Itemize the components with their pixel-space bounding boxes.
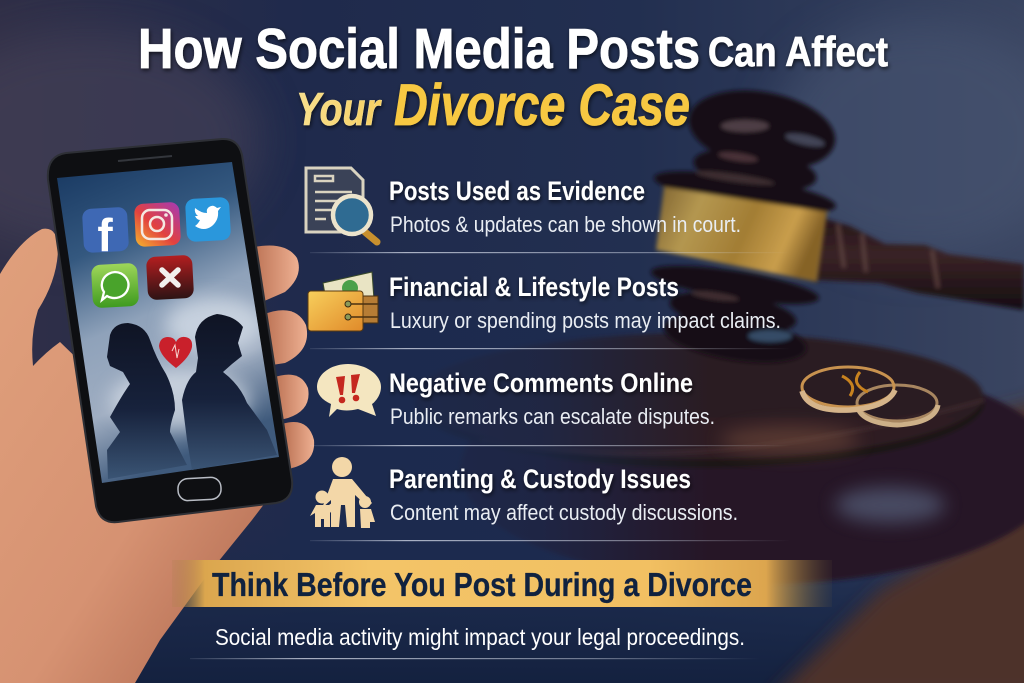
title line 1: How Social Media Posts — [138, 17, 700, 81]
fingers — [250, 246, 314, 472]
item: parenting and custody issues — [310, 457, 738, 528]
description: Public remarks can escalate disputes. — [390, 404, 715, 429]
icon: facebook — [82, 207, 129, 261]
icon: instagram — [134, 202, 181, 247]
description: Luxury or spending posts may impact claims. — [390, 308, 781, 333]
broken heart — [159, 337, 192, 368]
gold band — [656, 187, 827, 282]
banner heading: Think Before You Post During a Divorce — [212, 566, 752, 603]
home button — [177, 477, 222, 501]
block highlights — [720, 426, 945, 523]
hand — [0, 229, 314, 683]
item: financial and lifestyle posts — [308, 272, 781, 333]
description: Content may affect custody discussions. — [390, 500, 738, 525]
icon: speech bubble with exclamation marks — [317, 364, 381, 417]
silhouette: man — [182, 314, 277, 470]
gavel head — [649, 80, 841, 371]
title line 2: Your — [296, 83, 382, 135]
heading: Negative Comments Online — [389, 368, 693, 398]
closing note: Social media activity might impact your legal proceedings. — [215, 624, 745, 650]
icon: blocked app — [146, 255, 194, 300]
title line 2 — [296, 73, 690, 138]
description: Photos & updates can be shown in court. — [390, 212, 741, 237]
sound block — [415, 333, 1024, 584]
icon: wallet with cash — [308, 272, 378, 331]
palm and thumb — [0, 229, 290, 683]
icon: family — [310, 457, 375, 528]
heading: Parenting & Custody Issues — [389, 464, 691, 494]
wedding rings — [802, 367, 938, 425]
smartphone — [48, 139, 292, 522]
clouds — [110, 297, 265, 430]
navy fade over left of block — [290, 320, 710, 590]
icon: whatsapp — [91, 263, 139, 308]
banner ribbon — [172, 560, 832, 607]
phone body — [48, 139, 292, 522]
icon: twitter — [185, 197, 231, 242]
call-to-action banner — [172, 560, 832, 607]
phone speaker — [118, 156, 172, 161]
title — [138, 17, 888, 138]
phone screen — [57, 162, 279, 483]
gavel handle — [815, 218, 1024, 310]
silhouette: woman — [107, 323, 187, 479]
heading: Financial & Lifestyle Posts — [389, 272, 679, 302]
title line 2: Divorce Case — [394, 73, 690, 138]
gavel and sound block — [290, 80, 1024, 590]
item: negative comments online — [317, 364, 715, 429]
icon: document and magnifier — [306, 168, 377, 242]
heading: Posts Used as Evidence — [389, 176, 645, 206]
title line 1: Can Affect — [708, 28, 888, 75]
icon: facebook: f — [97, 209, 113, 261]
item: posts used as evidence — [306, 168, 741, 242]
